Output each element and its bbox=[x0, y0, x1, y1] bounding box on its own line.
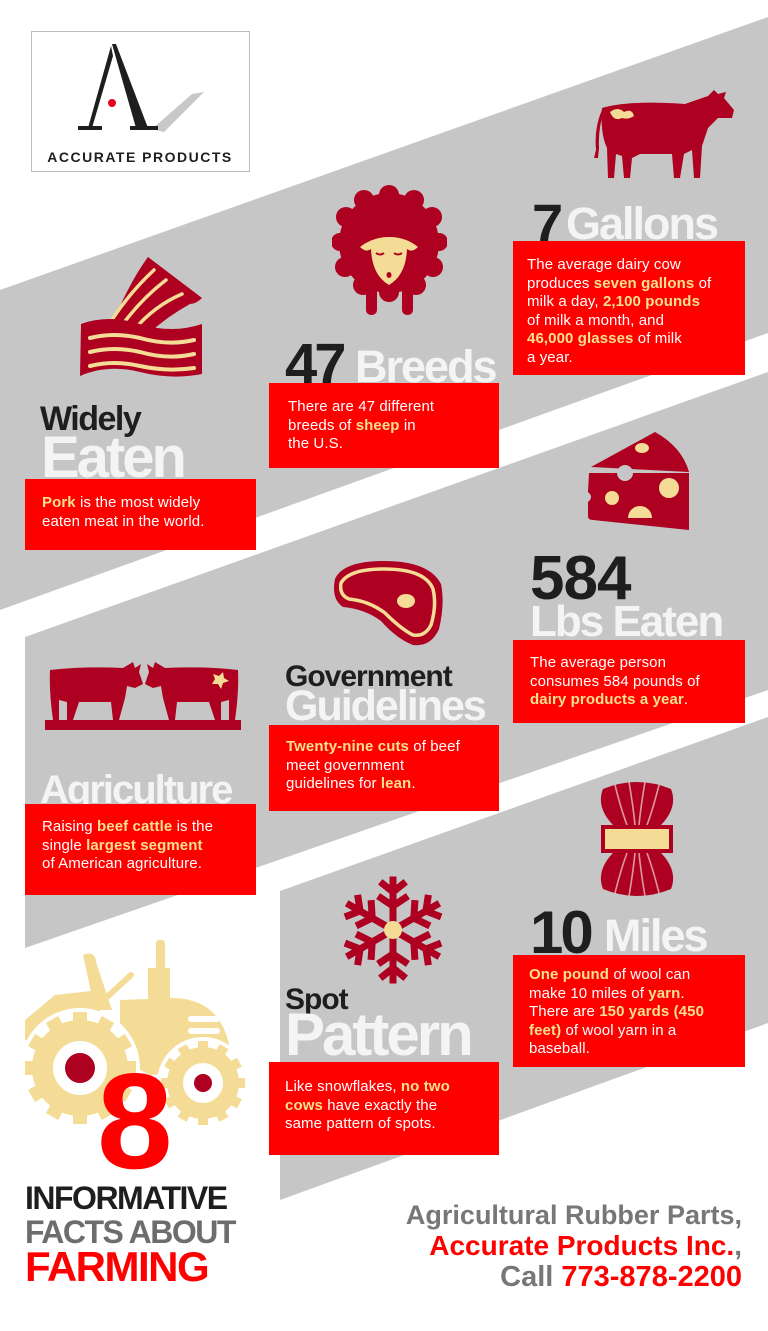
title: 8 informative facts about farming: 8 bbox=[97, 1045, 169, 1197]
panel: spot pattern fact: cows have exactly the bbox=[285, 1096, 437, 1114]
panel: beef cattle fact: single largest segment bbox=[42, 836, 203, 854]
heading: Agriculture: Agriculture bbox=[40, 768, 231, 812]
panel: dairy cow fact: of milk a month, and bbox=[527, 312, 664, 328]
heading: 10 Miles bbox=[530, 899, 707, 966]
heading: 584 Lbs Eaten: Lbs Eaten bbox=[530, 597, 722, 646]
heading: 584 Lbs Eaten bbox=[530, 544, 722, 646]
footer: contact: Agricultural Rubber Parts, bbox=[406, 1200, 742, 1230]
icon: yarn bbox=[600, 782, 674, 896]
panel: wool fact: One pound of wool can bbox=[529, 966, 690, 983]
title: 8 informative facts about farming: FARMING bbox=[25, 1243, 208, 1290]
footer: contact bbox=[406, 1200, 742, 1293]
panel: wool fact bbox=[513, 955, 745, 1067]
heading: 7 Gallons bbox=[532, 192, 718, 255]
icon: snowflake bbox=[344, 876, 442, 984]
panel: beef cuts fact: guidelines for lean. bbox=[286, 775, 416, 792]
panel: sheep fact: breeds of sheep in bbox=[288, 416, 416, 434]
heading: 47 Breeds: Breeds bbox=[355, 341, 496, 392]
icon: steak bbox=[334, 561, 443, 646]
logo bbox=[31, 31, 250, 172]
panel: wool fact: make 10 miles of yarn. bbox=[529, 984, 685, 1002]
title: 8 informative facts about farming: FACTS ABOUT bbox=[25, 1214, 235, 1250]
panel: dairy consumption fact: consumes 584 pounds of bbox=[530, 672, 700, 690]
panel: beef cattle fact: of American agriculture. bbox=[42, 855, 202, 872]
panel: beef cuts fact bbox=[269, 725, 499, 811]
heading: 47 Breeds: 47 bbox=[285, 332, 344, 397]
heading: Government Guidelines: Government bbox=[285, 660, 452, 693]
icon: cheese bbox=[588, 432, 689, 530]
panel: dairy consumption fact: The average person bbox=[530, 654, 666, 671]
heading: 7 Gallons: 7 bbox=[532, 192, 562, 255]
panel: dairy cow fact: The average dairy cow bbox=[527, 256, 681, 273]
icon: bacon bbox=[80, 257, 202, 377]
heading: Government Guidelines bbox=[285, 660, 485, 730]
panel: pork fact: eaten meat in the world. bbox=[42, 512, 204, 530]
panel: spot pattern fact bbox=[269, 1062, 499, 1155]
panel: dairy cow fact bbox=[513, 241, 745, 375]
logo: ACCURATE PRODUCTS bbox=[47, 149, 233, 165]
panel: wool fact: baseball. bbox=[529, 1040, 590, 1057]
icon: dairy cow bbox=[594, 90, 734, 178]
panel: sheep fact: the U.S. bbox=[288, 435, 343, 452]
panel: spot pattern fact: Like snowflakes, no two bbox=[285, 1078, 450, 1095]
heading: Widely Eaten: Widely bbox=[40, 400, 140, 438]
panel: dairy consumption fact: dairy products a year. bbox=[530, 691, 688, 708]
panel: dairy consumption fact bbox=[513, 640, 745, 723]
panel: wool fact: There are 150 yards (450 bbox=[529, 1003, 704, 1020]
heading: 10 Miles: Miles bbox=[604, 910, 707, 961]
heading: 10 Miles: 10 bbox=[530, 899, 591, 966]
panel: wool fact: feet) of wool yarn in a bbox=[529, 1022, 676, 1038]
heading: Widely Eaten: Eaten bbox=[41, 425, 184, 490]
heading: Spot Pattern: Pattern bbox=[285, 1001, 471, 1068]
panel: beef cattle fact: Raising beef cattle is the bbox=[42, 818, 213, 835]
panel: beef cuts fact: meet government bbox=[286, 756, 404, 774]
panel: spot pattern fact: same pattern of spots. bbox=[285, 1115, 436, 1132]
heading: 47 Breeds bbox=[285, 332, 496, 397]
icon: two cattle bbox=[45, 662, 241, 730]
heading: Spot Pattern: Spot bbox=[285, 983, 348, 1016]
footer: contact: Call 773-878-2200 bbox=[500, 1261, 742, 1293]
title: 8 informative facts about farming bbox=[25, 1045, 236, 1290]
footer: contact: Accurate Products Inc., bbox=[429, 1230, 742, 1261]
panel: dairy cow fact: milk a day, 2,100 pounds bbox=[527, 293, 700, 310]
heading: 7 Gallons: Gallons bbox=[566, 198, 717, 249]
icon: sheep bbox=[332, 185, 447, 315]
panel: pork fact bbox=[25, 479, 256, 550]
heading: Government Guidelines: Guidelines bbox=[285, 682, 485, 730]
panel: dairy cow fact: produces seven gallons of bbox=[527, 274, 711, 292]
panel: sheep fact: There are 47 different bbox=[288, 398, 434, 415]
panel: dairy cow fact: a year. bbox=[527, 348, 573, 366]
icon: tractor bbox=[25, 940, 245, 1125]
panel: pork fact: Pork is the most widely bbox=[42, 494, 200, 511]
panel: dairy cow fact: 46,000 glasses of milk bbox=[527, 330, 682, 347]
panel: beef cattle fact bbox=[25, 804, 256, 895]
panel: beef cuts fact: Twenty-nine cuts of beef bbox=[286, 738, 460, 755]
title: 8 informative facts about farming: INFORMATIVE bbox=[25, 1180, 227, 1216]
panel: sheep fact bbox=[269, 383, 499, 468]
heading: 584 Lbs Eaten: 584 bbox=[530, 544, 630, 613]
